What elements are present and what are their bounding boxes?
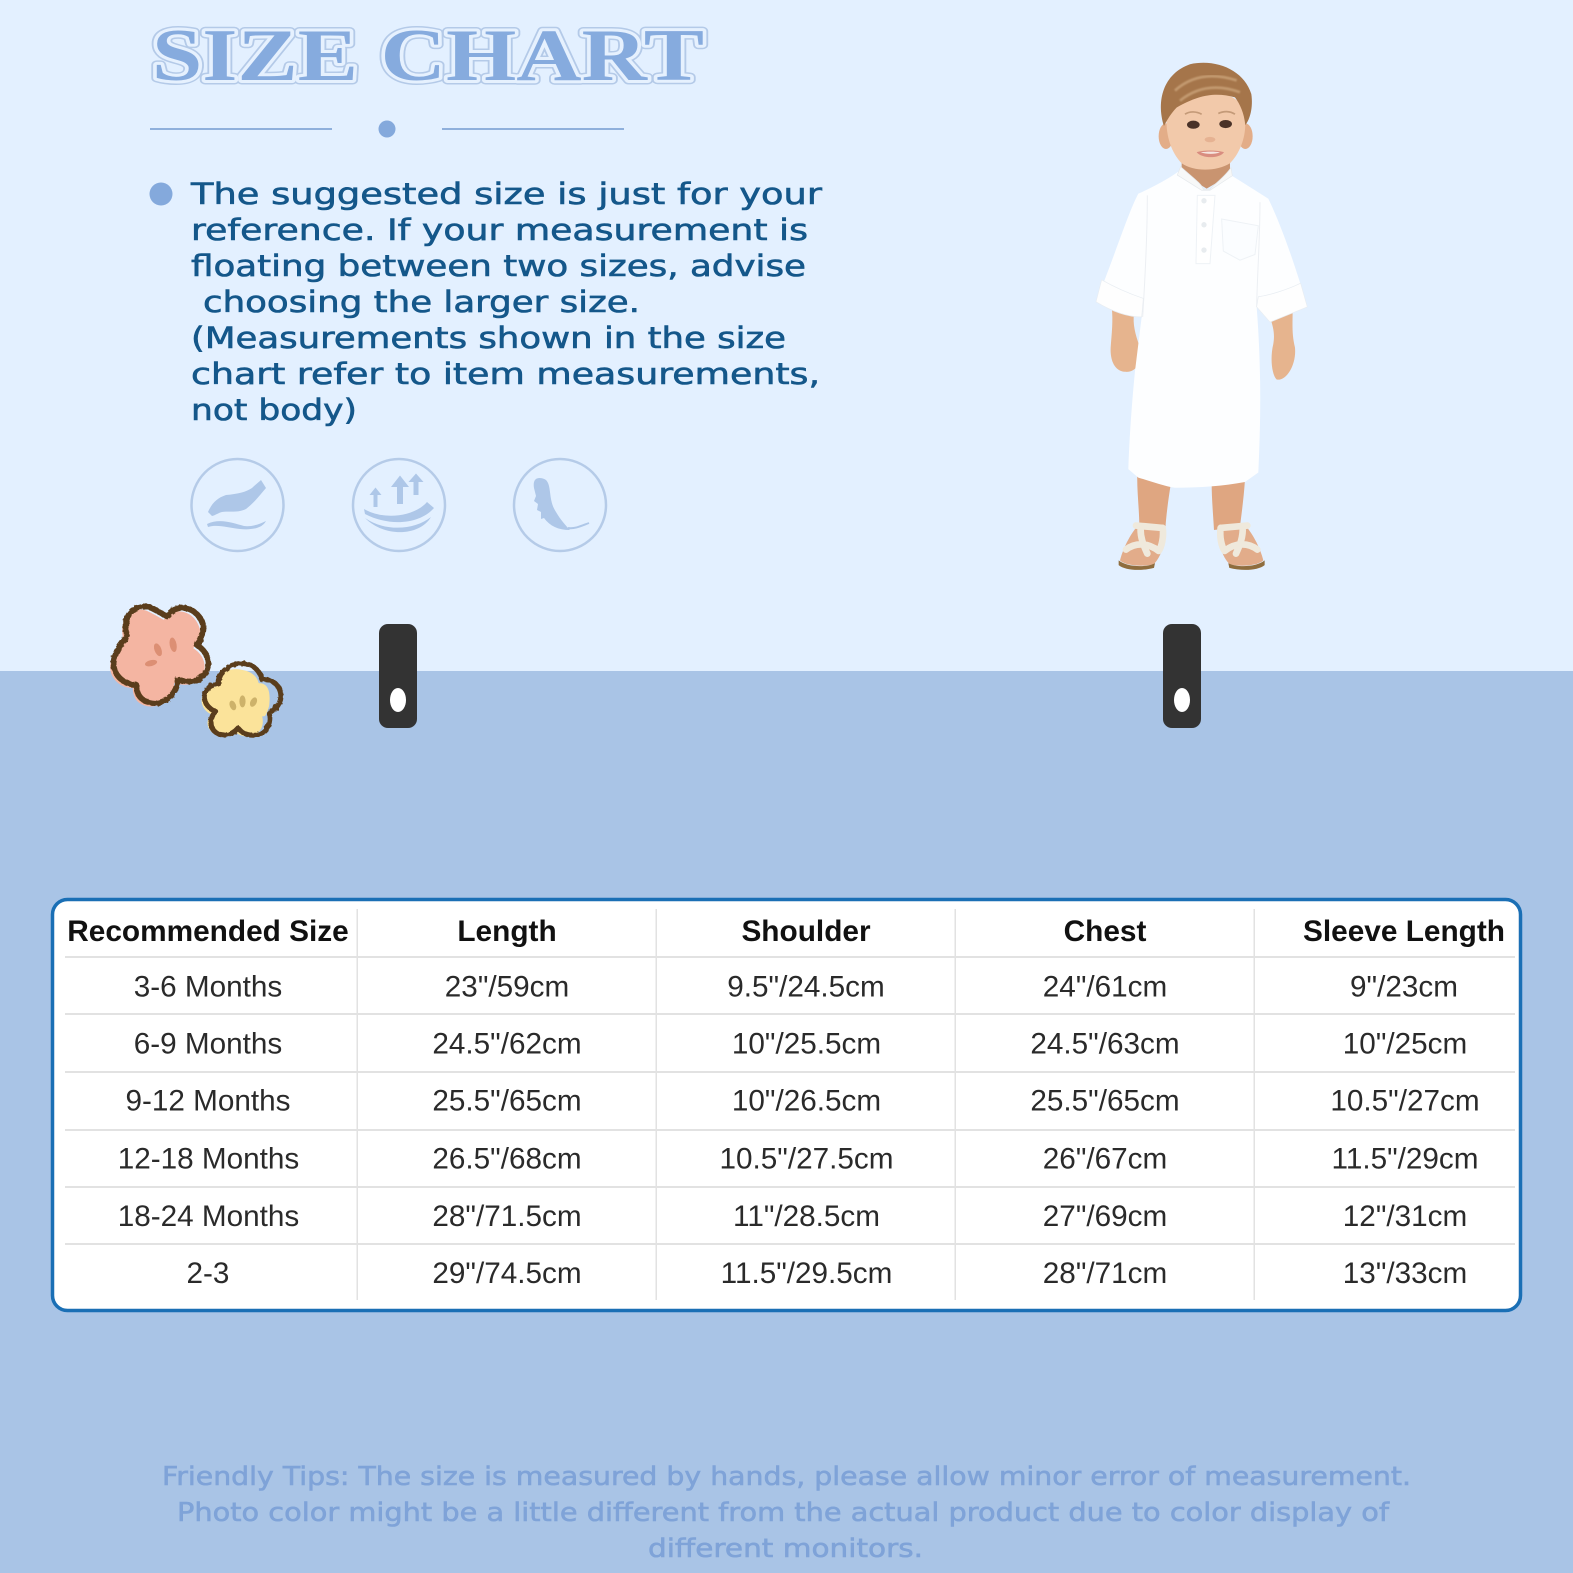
table header row: Recommended Size — [67, 915, 349, 948]
row: 6-9 months: 24.5"/62cm — [432, 1028, 582, 1060]
row: 2-3: 11.5"/29.5cm — [721, 1257, 892, 1290]
note text block: not body) — [191, 393, 357, 427]
legs — [1137, 472, 1245, 530]
left sandal — [1119, 523, 1165, 570]
title divider — [150, 120, 624, 138]
table header row: Chest — [1064, 915, 1146, 948]
table header row — [67, 915, 1505, 948]
face — [1166, 91, 1245, 170]
title: SIZE CHART — [152, 15, 704, 97]
eyebrows — [1185, 112, 1235, 114]
friendly tips text: Friendly Tips: The size is measured by hands, please allow minor error of measurement. — [162, 1462, 1411, 1492]
row: 12-18 months — [118, 1142, 1478, 1176]
row: 2-3: 13"/33cm — [1343, 1257, 1467, 1290]
hair highlights — [1175, 76, 1240, 101]
friendly tips text — [162, 1462, 1411, 1564]
row: 18-24 months: 28"/71.5cm — [432, 1200, 582, 1233]
table header row: Length — [457, 915, 557, 948]
row: 6-9 months: 6-9 Months — [134, 1028, 282, 1060]
robe — [1096, 172, 1307, 488]
eyes — [1187, 121, 1200, 129]
neck — [1182, 162, 1230, 189]
row: 2-3: 2-3 — [187, 1257, 229, 1290]
mouth — [1197, 151, 1224, 157]
friendly tips text: Photo color might be a little different from the actual product due to color display of — [177, 1498, 1390, 1528]
arms and hands — [1111, 307, 1140, 372]
note text block: floating between two sizes, advise — [191, 249, 806, 283]
icon: feather — [514, 459, 606, 551]
row: 18-24 months — [118, 1200, 1467, 1233]
title: SIZE CHART — [152, 15, 704, 97]
note text block: choosing the larger size. — [203, 285, 640, 319]
row: 2-3 — [187, 1257, 1467, 1290]
icon: pink flower — [110, 606, 208, 707]
row: 9-12 months: 9-12 Months — [125, 1084, 291, 1118]
row: 12-18 months: 11.5"/29cm — [1332, 1142, 1478, 1176]
size table card — [52, 900, 1520, 1310]
row: 3-6 months: 23"/59cm — [445, 970, 569, 1004]
row: 2-3: 28"/71cm — [1043, 1257, 1167, 1290]
note text block: (Measurements shown in the size — [191, 321, 786, 355]
note text block — [190, 177, 822, 427]
icon: breathable arrows — [353, 459, 445, 551]
row: 9-12 months: 25.5"/65cm — [432, 1084, 582, 1118]
left clip — [379, 624, 417, 728]
row: 3-6 months: 9.5"/24.5cm — [727, 970, 885, 1004]
table grid lines — [65, 909, 1515, 1300]
note text block: The suggested size is just for your — [190, 177, 822, 211]
collar — [1177, 167, 1232, 190]
hair — [1161, 63, 1252, 126]
friendly tips text: different monitors. — [648, 1534, 923, 1564]
ears — [1159, 123, 1173, 149]
row: 12-18 months: 12-18 Months — [118, 1142, 299, 1176]
row: 9-12 months: 25.5"/65cm — [1030, 1084, 1180, 1118]
row: 6-9 months — [134, 1028, 1467, 1060]
row: 9-12 months — [125, 1084, 1480, 1118]
row: 3-6 months: 9"/23cm — [1350, 970, 1458, 1004]
note text block: chart refer to item measurements, — [191, 357, 820, 391]
row: 6-9 months: 10"/25cm — [1343, 1028, 1467, 1060]
robe folds — [1143, 195, 1260, 317]
toddler in white robe — [1096, 63, 1307, 570]
right clip — [1163, 624, 1201, 728]
row: 3-6 months: 24"/61cm — [1043, 970, 1167, 1004]
row: 9-12 months: 10"/26.5cm — [732, 1084, 881, 1118]
table header row: Shoulder — [741, 915, 871, 948]
bottom background panel — [0, 671, 1573, 1573]
nose — [1205, 137, 1215, 142]
row: 2-3: 29"/74.5cm — [432, 1257, 582, 1290]
row: 18-24 months: 18-24 Months — [118, 1200, 299, 1233]
row: 18-24 months: 27"/69cm — [1043, 1200, 1167, 1233]
row: 6-9 months: 24.5"/63cm — [1030, 1028, 1180, 1060]
right sandal — [1218, 523, 1265, 570]
table header row: Sleeve Length — [1303, 915, 1505, 948]
row: 12-18 months: 26"/67cm — [1043, 1142, 1167, 1176]
bullet dot — [150, 182, 172, 206]
title: SIZE CHART — [152, 15, 704, 97]
row: 6-9 months: 10"/25.5cm — [732, 1028, 881, 1060]
row: 12-18 months: 10.5"/27.5cm — [720, 1142, 893, 1176]
row: 3-6 months — [134, 970, 1458, 1004]
row: 18-24 months: 12"/31cm — [1343, 1200, 1467, 1233]
row: 9-12 months: 10.5"/27cm — [1330, 1084, 1480, 1118]
row: 18-24 months: 11"/28.5cm — [733, 1200, 880, 1233]
icon: yellow flower — [202, 663, 281, 737]
row: 12-18 months: 26.5"/68cm — [432, 1142, 582, 1176]
top background panel — [0, 0, 1573, 671]
row: 3-6 months: 3-6 Months — [134, 970, 282, 1004]
note text block: reference. If your measurement is — [191, 213, 808, 247]
icon: hand — [192, 459, 284, 551]
